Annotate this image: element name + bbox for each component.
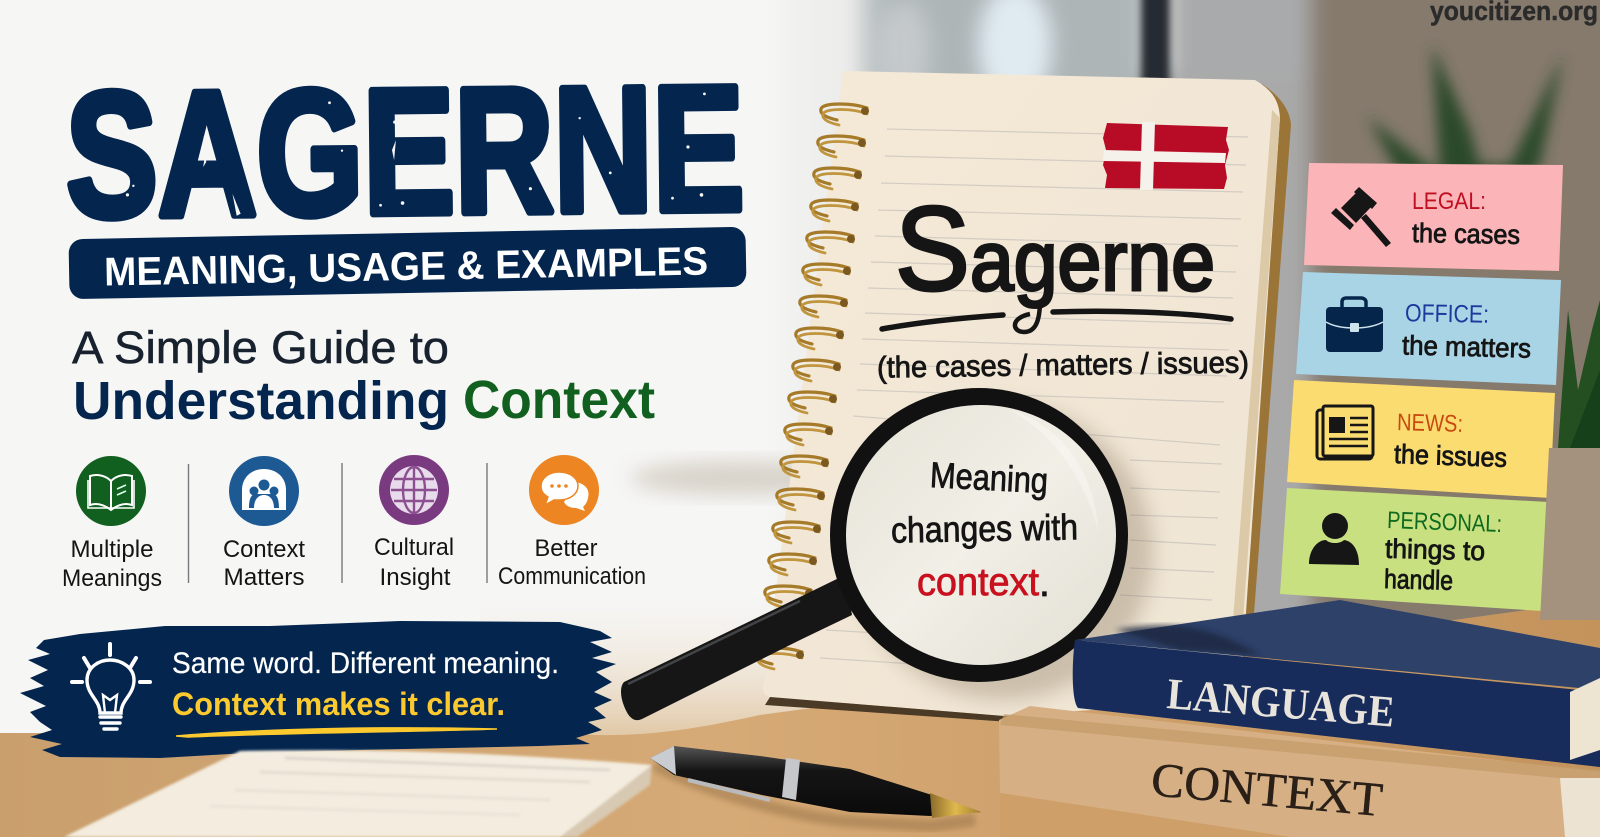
blurred open notebook on desk: [64, 750, 652, 837]
icon: open book: [76, 456, 146, 526]
book: language: [1073, 600, 1600, 767]
icon: person: [1309, 513, 1359, 565]
feature: context matters: [223, 456, 305, 591]
book: context: [999, 706, 1600, 837]
feature: better communication: Communication: [498, 563, 646, 590]
handwritten translation: (the cases / matters / issues): [877, 346, 1249, 385]
icon: light bulb: [72, 644, 150, 729]
handwritten word: Sagerne: Sagerne: [895, 182, 1215, 316]
sticky note: office: [1296, 272, 1561, 385]
magnifier text: .: [1039, 562, 1050, 605]
feature: cultural insight: Insight: [380, 564, 451, 591]
sticky note: personal: handle: [1384, 564, 1453, 596]
sticky note: office: OFFICE:: [1405, 299, 1489, 329]
magnifier text: context: [917, 561, 1039, 604]
notebook: [756, 71, 1291, 722]
icon: briefcase: [1326, 298, 1383, 352]
sticky note: news: the issues: [1394, 439, 1508, 473]
flag: Denmark: [1103, 122, 1229, 190]
feature: cultural insight: [374, 455, 454, 591]
callout: brush banner: [20, 621, 616, 758]
sticky note: legal: [1304, 163, 1563, 271]
sticky note: personal: PERSONAL:: [1387, 507, 1503, 538]
sticky note: news: [1287, 380, 1555, 498]
magnifier handle: [621, 575, 852, 720]
feature: context matters: Matters: [224, 564, 304, 591]
feature: better communication: [498, 455, 646, 590]
magnifier text: changes with: [891, 506, 1078, 551]
title: SAGERNE: SAGERNE: [65, 48, 745, 255]
icon: globe: [379, 455, 449, 525]
feature: better communication: Better: [534, 535, 598, 562]
icon: speech bubbles: [529, 455, 599, 525]
sticky note: office: the matters: [1402, 330, 1531, 364]
feature: multiple meanings: Multiple: [70, 536, 154, 563]
blurred plant: [1368, 45, 1563, 215]
ruled lines: [820, 129, 1248, 665]
icon: newspaper: [1317, 406, 1373, 459]
feature: multiple meanings: Meanings: [62, 565, 162, 592]
plant and pot: [1540, 300, 1600, 620]
sticky note: legal: LEGAL:: [1412, 188, 1486, 215]
magnifying glass: [621, 388, 1153, 720]
heading: a simple guide: Context: [463, 370, 655, 430]
heading: a simple guide: Understanding: [73, 371, 449, 431]
heading: a simple guide: [72, 322, 655, 431]
book: language: LANGUAGE: [1165, 669, 1396, 737]
sticky note: legal: the cases: [1412, 218, 1520, 250]
sticky note: news: NEWS:: [1397, 409, 1463, 438]
feature: multiple meanings: [62, 456, 162, 592]
subtitle banner: MEANING, USAGE & EXAMPLES: [104, 239, 708, 295]
heading: a simple guide: A Simple Guide to: [72, 322, 449, 373]
sticky note: personal: [1280, 488, 1549, 611]
magnifier text: Meaning: [929, 454, 1049, 501]
spiral binding: [756, 104, 869, 669]
pen: [650, 746, 981, 826]
callout: brush banner: Same word. Different meaning.: [172, 647, 559, 680]
magnifier text: [891, 454, 1078, 605]
icon: gavel: [1331, 187, 1391, 247]
callout: brush banner: Context makes it clear.: [172, 686, 505, 722]
feature: cultural insight: Cultural: [374, 534, 454, 561]
sticky note: personal: things to: [1385, 534, 1485, 566]
icon: people: [229, 456, 299, 526]
book: context: CONTEXT: [1149, 753, 1385, 827]
feature: context matters: Context: [223, 536, 305, 563]
